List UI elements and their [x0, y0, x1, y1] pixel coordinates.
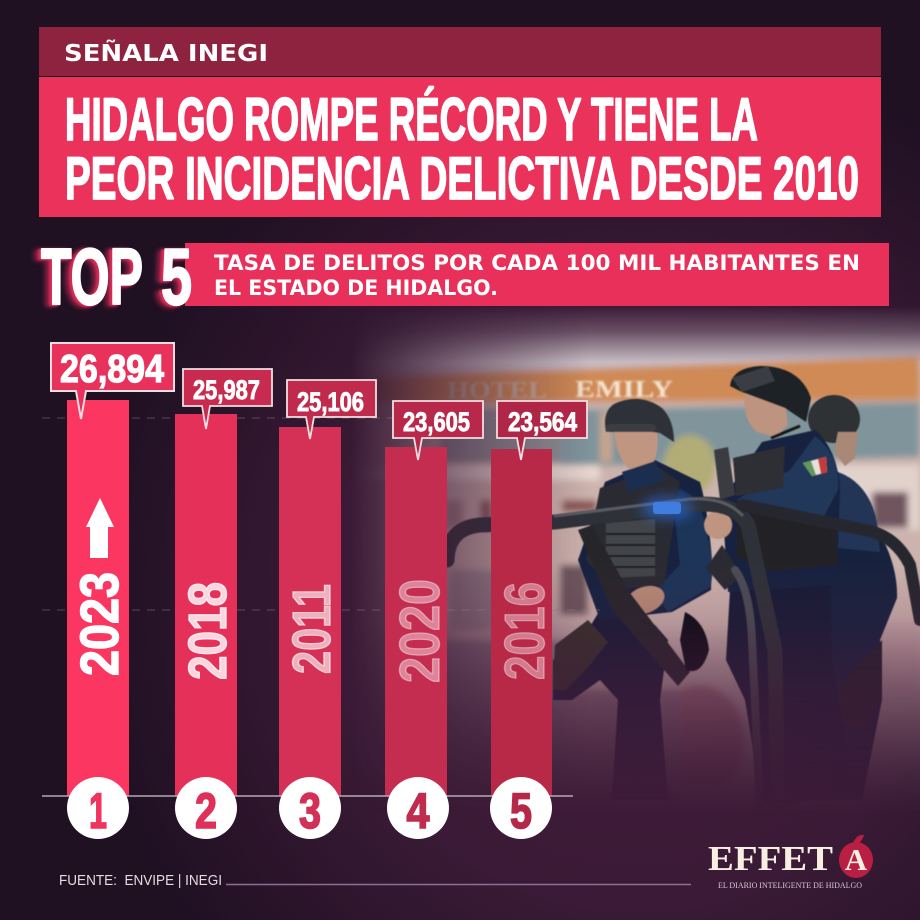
rank badge 2: 2: [195, 783, 217, 839]
bag: [680, 612, 709, 671]
bar 2011: 2011: [282, 584, 342, 674]
officer 3, rear: [800, 395, 897, 800]
roll bar of the truck: [447, 499, 920, 810]
rank badge 1: 1: [89, 783, 107, 839]
rank badge 4: 4: [406, 783, 430, 839]
value callout 26,894: [51, 343, 174, 419]
helmet: [730, 366, 811, 422]
hotel sign: [448, 380, 674, 399]
bar 2018: [175, 414, 238, 796]
goggles: [732, 366, 775, 392]
torso: [722, 430, 840, 592]
value callout 23,564: [497, 401, 587, 460]
logo: Effetá: EL DIARIO INTELIGENTE DE HIDALGO: [718, 880, 862, 890]
chin strap: [771, 426, 800, 438]
rank badge 3: [279, 777, 341, 839]
value callout 23,564: 23,564: [508, 407, 577, 437]
title: [39, 77, 881, 217]
face: [744, 392, 788, 437]
logo: Effetá: A: [845, 842, 868, 877]
knee pad: [553, 620, 608, 690]
hotel sign: EMILY: [575, 377, 673, 403]
rank badge 5: [490, 777, 552, 839]
officer 2: [703, 365, 840, 788]
arm: [736, 436, 838, 520]
subtitle band: [185, 243, 889, 306]
bar 2018: 2018: [178, 582, 238, 680]
arrow up: [86, 498, 114, 558]
hotel sign: HOTEL: [447, 378, 547, 404]
source note: FUENTE: ENVIPE | INEGI: [59, 872, 222, 889]
torso: [578, 460, 712, 620]
value callout 23,605: [393, 401, 483, 460]
rank badge 3: 3: [299, 783, 321, 839]
neck and face: [614, 430, 658, 471]
logo: Effetá: [708, 835, 873, 890]
value callout 23,605: 23,605: [403, 407, 470, 437]
subtitle band: EL ESTADO DE HIDALGO.: [214, 276, 498, 300]
value callout 25,106: [287, 380, 376, 439]
value callout 26,894: 26,894: [60, 348, 164, 391]
rank badge 5: 5: [510, 783, 532, 839]
top 5 heading: 5: [161, 232, 192, 321]
rifle barrel: [714, 447, 735, 500]
logo: Effetá: EFFET: [708, 839, 833, 878]
hand: [630, 585, 666, 614]
top 5 heading: TOP: [41, 232, 143, 321]
legs: [726, 586, 830, 788]
bar 2023: [67, 400, 130, 796]
blue police light: [641, 496, 693, 520]
value callout 25,987: 25,987: [193, 375, 260, 405]
flag patch: [803, 457, 827, 476]
photo: police officers on a patrol truck: [361, 310, 920, 784]
heading kicker band: SEÑALA INEGI: [64, 39, 268, 67]
bar 2011: [279, 427, 342, 796]
subtitle band: TASA DE DELITOS POR CADA 100 MIL HABITANTES EN: [214, 251, 860, 275]
right sleeve: [654, 488, 712, 612]
heading kicker band: [39, 27, 881, 76]
value callout 25,987: [183, 369, 272, 429]
bar 2020: 2020: [388, 579, 452, 683]
bar 2016: 2016: [493, 582, 557, 680]
photo colour tint: [447, 579, 920, 800]
hand: [704, 511, 732, 539]
rank badge 4: [387, 777, 449, 839]
rank badge 1: [67, 777, 129, 839]
rank badge 2: [175, 777, 237, 839]
bar chart: [67, 400, 557, 796]
bar 2020: [385, 447, 452, 796]
vest: [586, 468, 680, 590]
bar 2023: 2023: [70, 572, 130, 676]
bar 2016: [491, 449, 557, 796]
photo background: building: [361, 310, 920, 784]
reference dashed lines: [42, 418, 600, 610]
officer 1: [553, 399, 712, 800]
value callout 25,106: 25,106: [297, 387, 364, 417]
axis line: [42, 795, 573, 797]
rifle: [578, 525, 690, 686]
vest: [733, 446, 785, 496]
legs: [553, 610, 668, 800]
helmet: [605, 399, 674, 442]
